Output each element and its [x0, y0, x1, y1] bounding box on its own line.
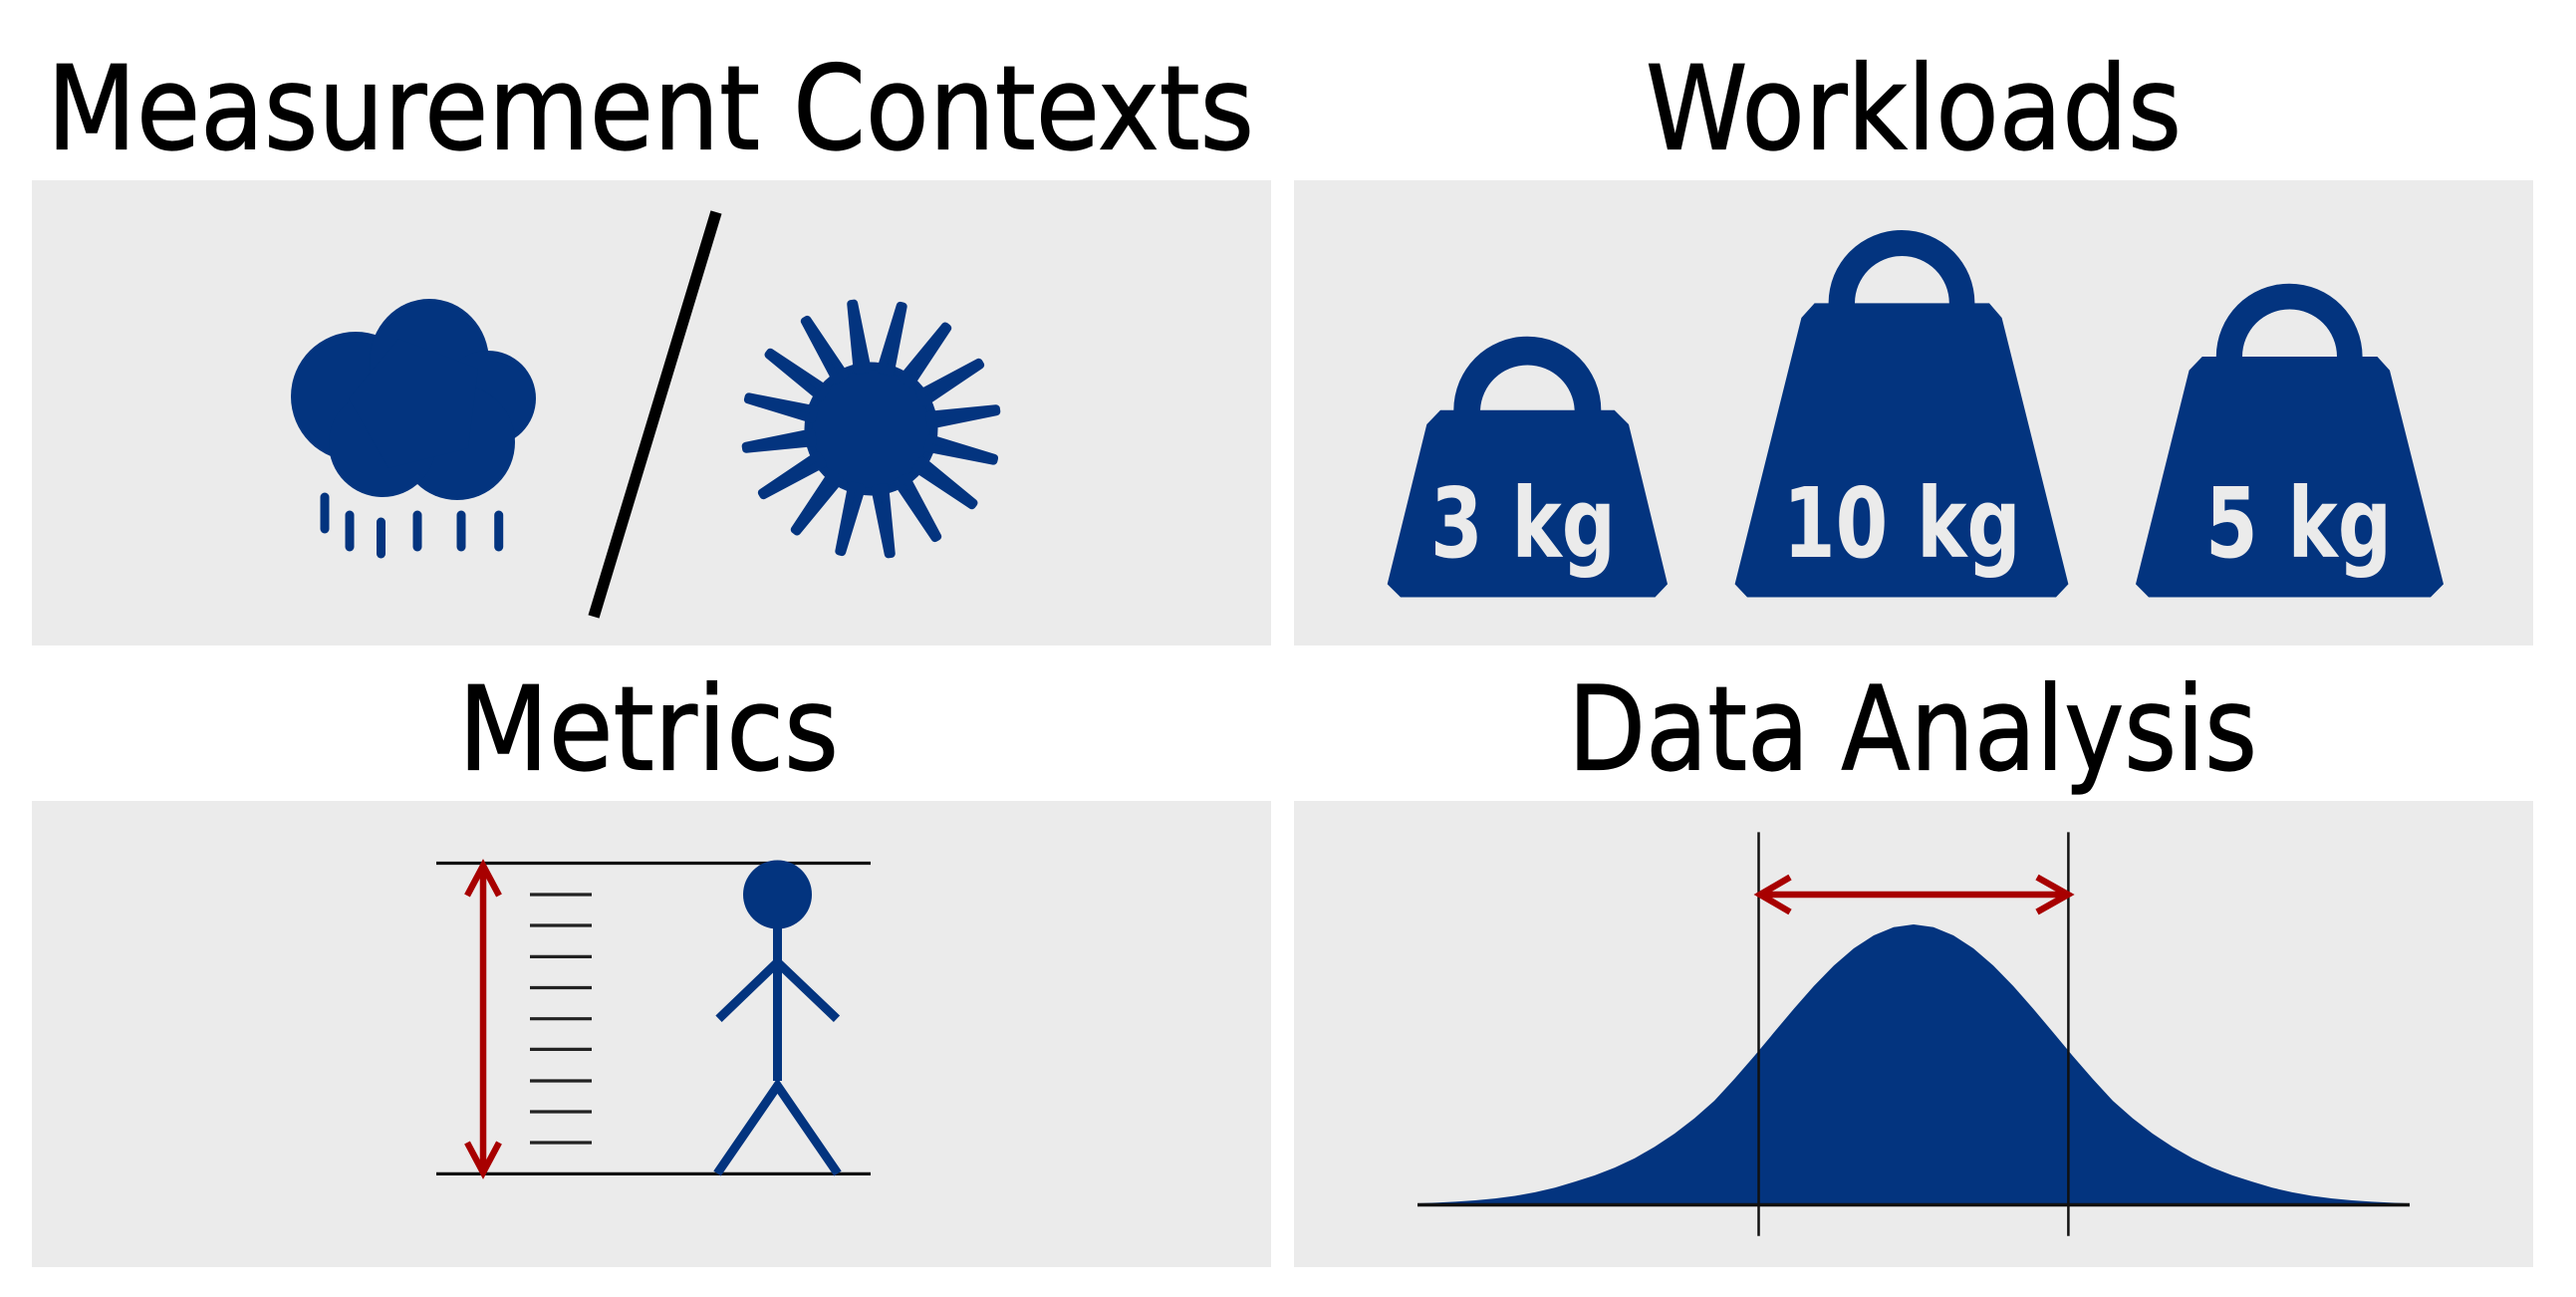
heading: data analysis: Data Analysis [1568, 661, 2257, 798]
icon: sun [745, 303, 997, 555]
label: 10 kg: 10 [1783, 467, 1888, 580]
heading: workloads: Workloads [1646, 40, 2182, 177]
icon: 5 kg weight [2136, 284, 2444, 598]
panel: data analysis [1294, 661, 2533, 1267]
panel: measurement contexts [32, 40, 1271, 646]
chart axis and bounds [1417, 832, 2410, 1236]
label: 5 kg: kg [2288, 467, 2392, 580]
label: 10 kg: kg [1917, 467, 2021, 580]
label: 5 kg: 5 [2205, 467, 2258, 580]
label: 3 kg: kg [1512, 467, 1616, 580]
divider slash [594, 212, 716, 617]
icon: rain cloud [291, 299, 536, 554]
panel: metrics [32, 661, 1271, 1267]
chart: normal distribution curve [1418, 924, 2409, 1205]
panel background: data analysis [1294, 801, 2533, 1267]
icon: 10 kg weight [1735, 230, 2068, 597]
label: 3 kg: 3 [1430, 467, 1483, 580]
measuring ticks [530, 895, 592, 1143]
heading: metrics: Metrics [458, 661, 839, 798]
arrow: height span [467, 866, 499, 1172]
panel background: workloads [1294, 180, 2533, 646]
panel: workloads [1294, 40, 2533, 646]
panel background: metrics [32, 801, 1271, 1267]
heading: measurement contexts: Measurement Contexts [47, 40, 1254, 177]
height reference lines [436, 863, 871, 1173]
panel background: measurement contexts [32, 180, 1271, 646]
icon: stick figure [717, 861, 838, 1173]
icon: 3 kg weight [1388, 337, 1668, 598]
arrow: spread width [1760, 878, 2068, 912]
